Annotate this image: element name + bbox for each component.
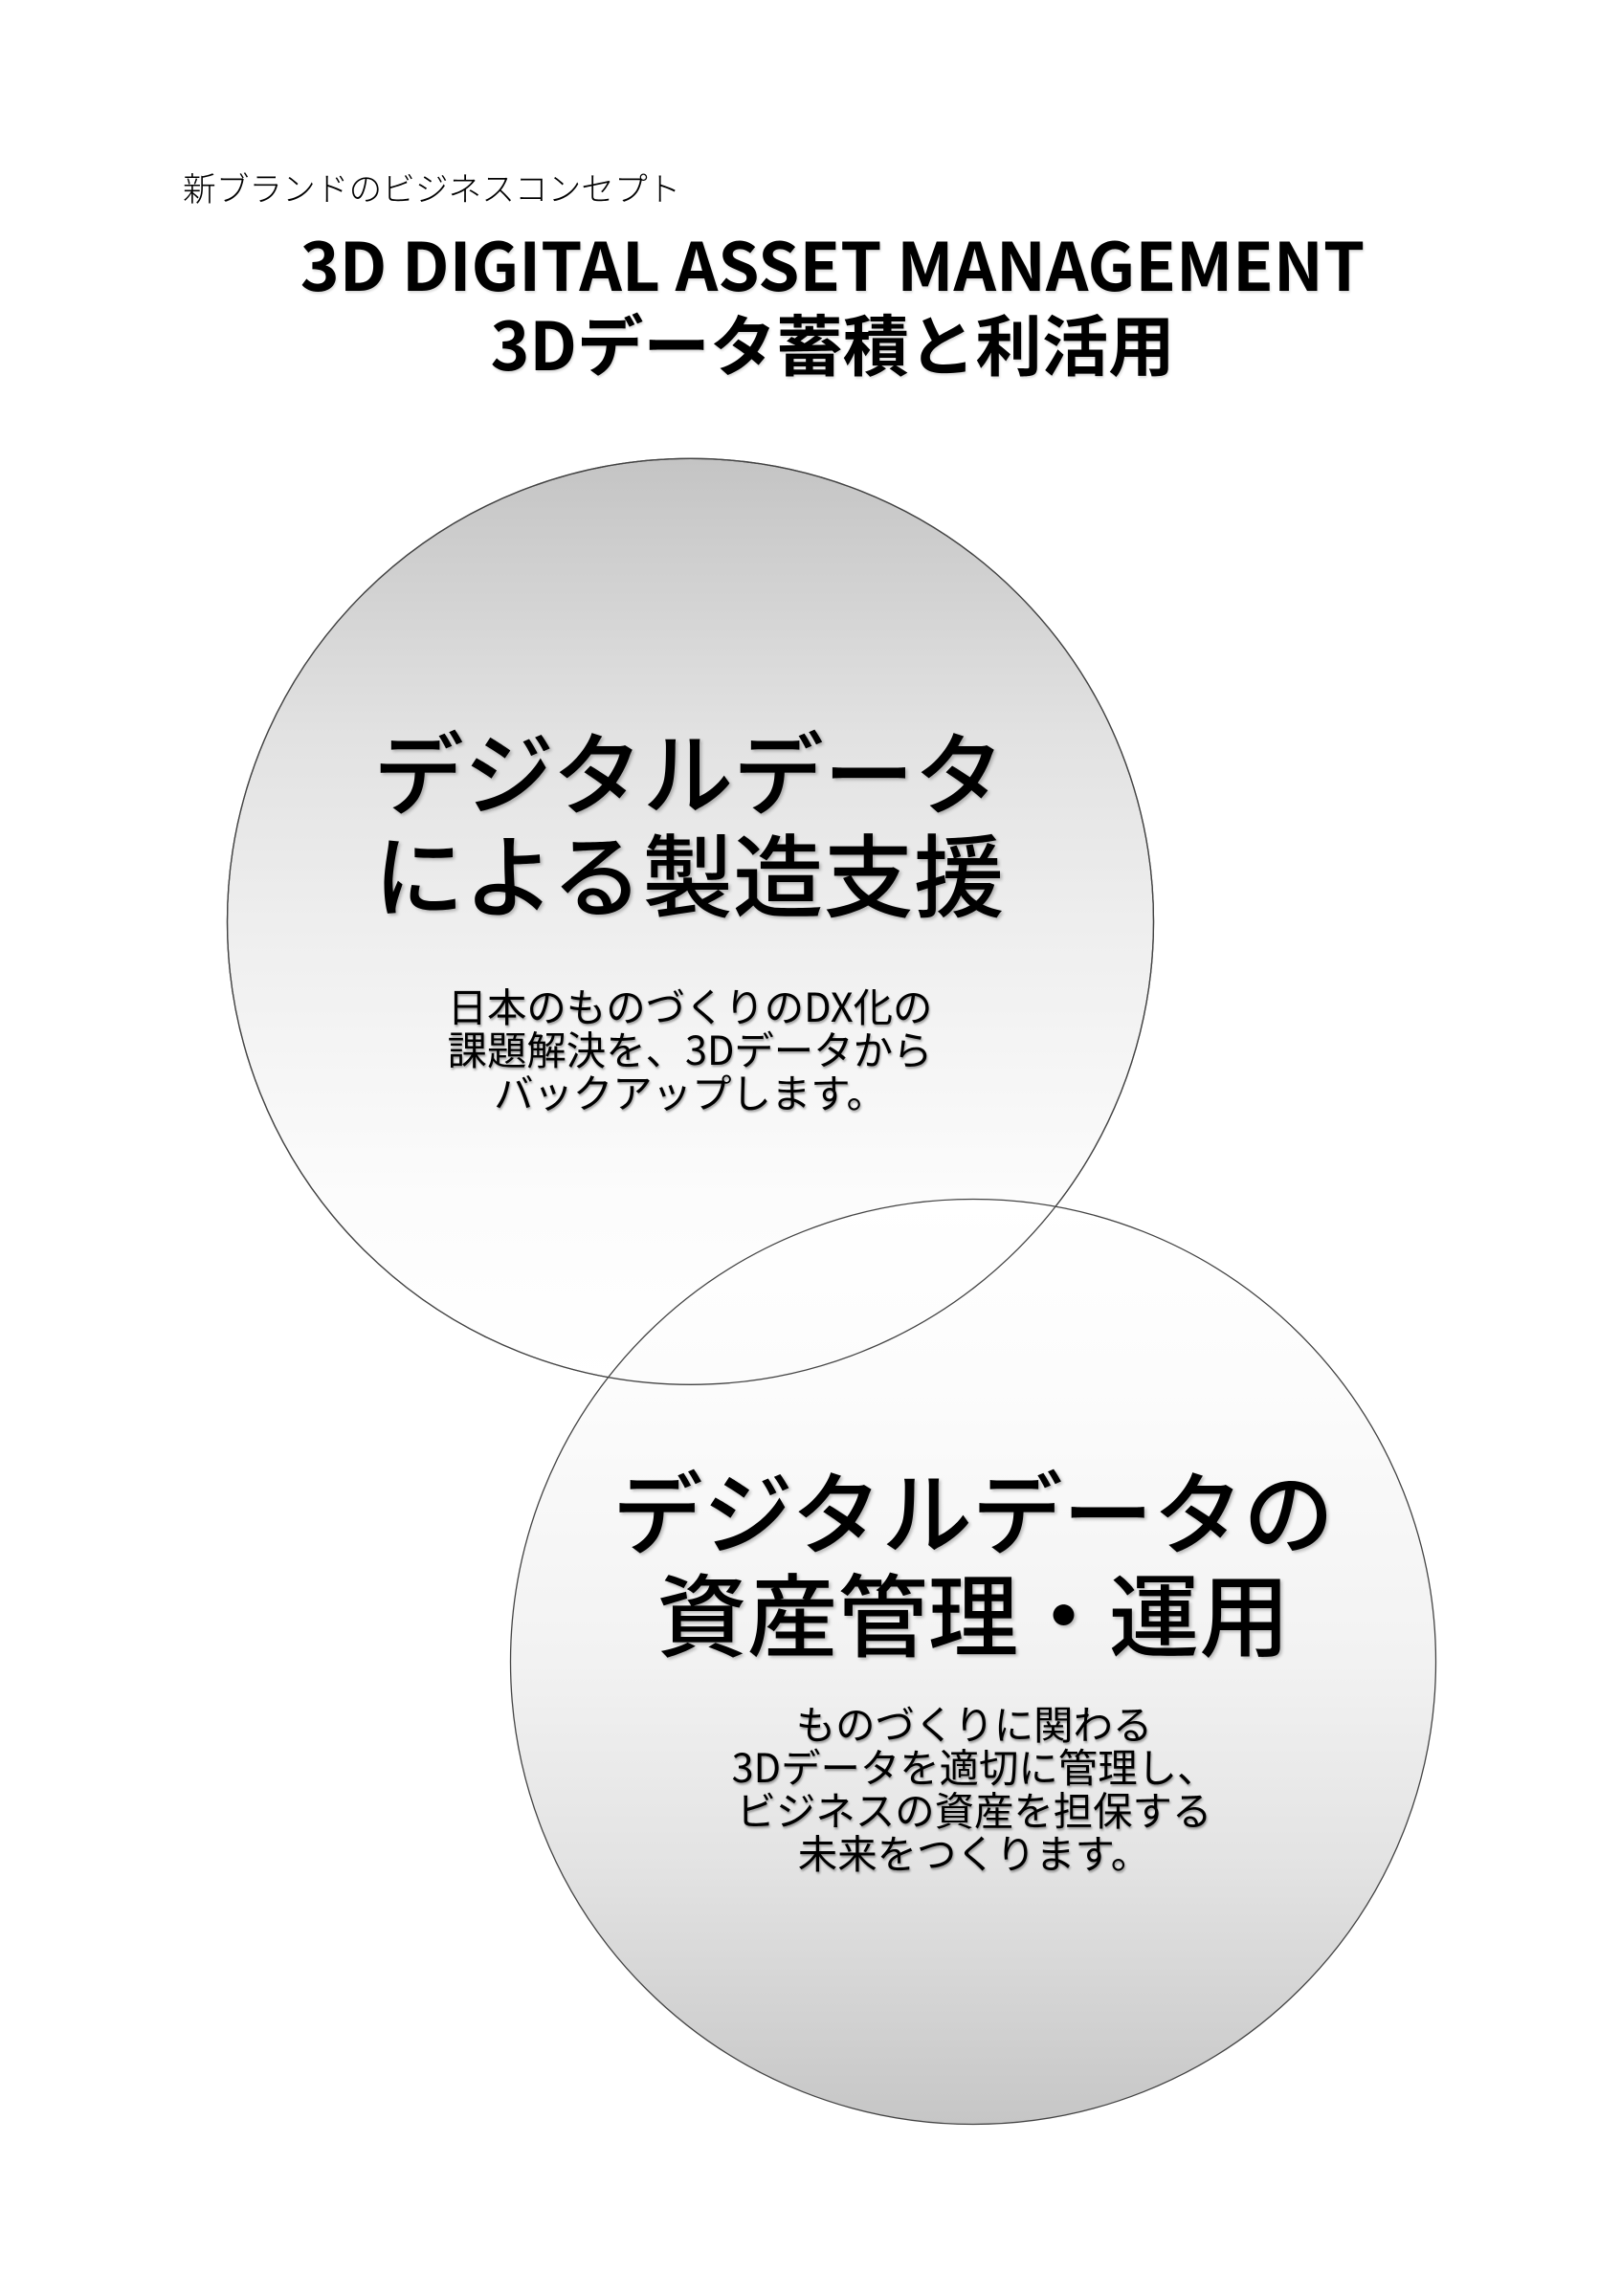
body text: asset management: ものづくりに関わる [796, 1693, 1152, 1751]
heading: digital data manufacturing support: による製造支援 [374, 806, 1004, 937]
body text: manufacturing support: 日本のものづくりのDX化の [448, 976, 932, 1033]
title [300, 213, 1365, 389]
heading: digital data asset management: 資産管理・運用 [656, 1545, 1290, 1676]
subtitle: 新ブランドのビジネスコンセプト [183, 163, 680, 210]
heading: digital data asset management: デジタルデータの [612, 1443, 1334, 1574]
body text: manufacturing support: 課題解決を、3Dデータから [448, 1019, 932, 1076]
body text: manufacturing support [448, 976, 932, 1119]
circle outline: overlap [228, 458, 1154, 1384]
heading: digital data manufacturing support: デジタルデータ [373, 703, 1005, 834]
body text: asset management: 未来をつくります。 [798, 1822, 1150, 1880]
title: 3Dデータ蓄積と利活用 [490, 293, 1175, 389]
body text: asset management [732, 1693, 1216, 1880]
body text: asset management: ビジネスの資産を担保する [737, 1779, 1211, 1837]
circle: digital manufacturing support [228, 458, 1154, 1384]
heading: digital data asset management [612, 1443, 1334, 1676]
circle: digital asset management [511, 1200, 1435, 2124]
title: 3D DIGITAL ASSET MANAGEMENT [300, 213, 1365, 310]
heading: digital data manufacturing support [373, 703, 1005, 937]
body text: asset management: 3Dデータを適切に管理し、 [732, 1736, 1216, 1794]
body text: manufacturing support: バックアップします。 [494, 1062, 886, 1119]
